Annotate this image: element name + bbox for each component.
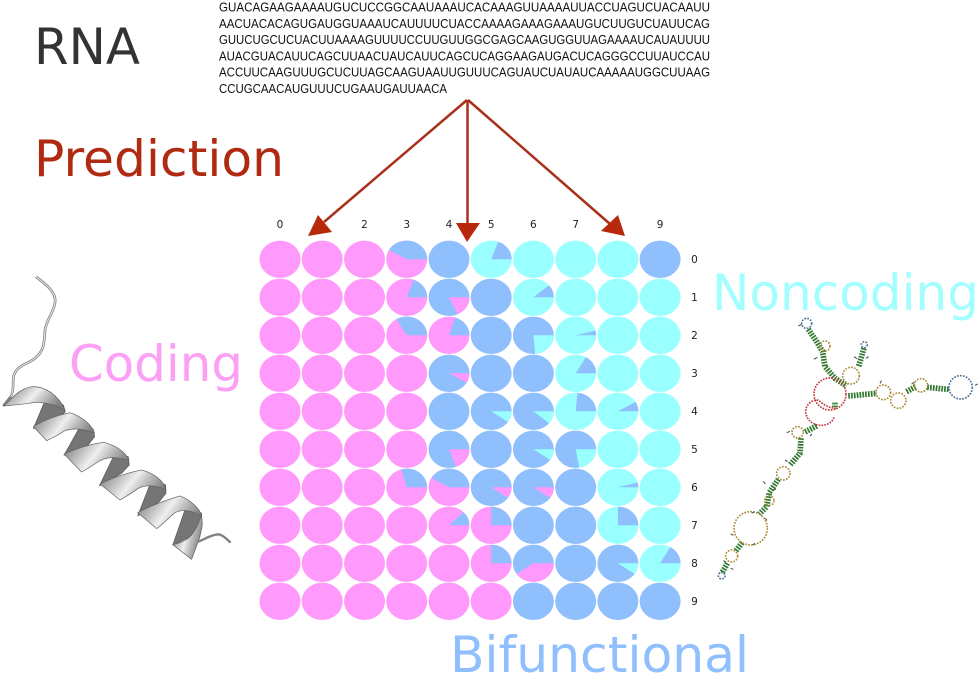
row axis labels: 0 — [691, 254, 698, 266]
pie row 6 — [260, 469, 681, 506]
column axis labels: 9 — [657, 219, 663, 231]
pie row 8 — [260, 545, 681, 582]
pie row 2 — [260, 317, 681, 354]
RNA sequence text block: AUACGUACAUUCAGCUUAACUAUCAUUCAGCUCAGGAAGAUGACUCAGGGCCUUAUCCAU — [219, 48, 710, 64]
pie row 9 — [260, 583, 681, 620]
column axis labels: 0 — [277, 219, 283, 231]
title: Prediction: Prediction — [34, 130, 284, 188]
pie row 7 — [260, 507, 681, 544]
arrow: to coding column — [308, 100, 467, 236]
pie row 0 — [260, 241, 681, 278]
row axis labels: 8 — [691, 558, 698, 570]
pie row 1 — [260, 279, 681, 316]
RNA secondary structure diagram — [718, 318, 978, 579]
arrow: to bifunctional column — [456, 100, 480, 242]
hairpin and internal loops — [718, 318, 972, 579]
pie row 5 — [260, 431, 681, 468]
label: Coding: Coding — [69, 335, 243, 393]
RNA sequence text block — [219, 0, 710, 96]
RNA sequence text block: CCUGCAACAUGUUUCUGAAUGAUUAACA — [219, 81, 447, 96]
row axis labels: 9 — [691, 596, 698, 608]
row axis labels: 7 — [691, 520, 698, 532]
column axis labels: 5 — [488, 219, 495, 231]
title: RNA: RNA — [34, 18, 140, 76]
row axis labels: 2 — [691, 330, 698, 342]
column axis labels: 3 — [403, 219, 410, 231]
row axis labels: 4 — [691, 406, 698, 418]
RNA sequence text block: ACCUUCAAGUUUGCUCUUAGCAAGUAAUUGUUUCAGUAUCUAUAUCAAAAAUGGCUUAAG — [219, 64, 710, 80]
column axis labels: 4 — [446, 219, 453, 231]
column axis labels: 6 — [530, 219, 537, 231]
stems — [722, 329, 949, 573]
row axis labels: 3 — [691, 368, 698, 380]
row axis labels: 5 — [691, 444, 698, 456]
RNA sequence text block: AACUACACAGUGAUGGUAAAUCAUUUUCUACCAAAAGAAAGAAAUGUCUUGUCUAUUCAG — [219, 16, 710, 31]
base tick marks — [723, 324, 978, 569]
protein helix ribbon illustration — [3, 277, 231, 559]
row axis labels — [691, 254, 698, 608]
label: Noncoding: Noncoding — [712, 264, 979, 322]
column axis labels: 2 — [361, 219, 368, 231]
pie row 4 — [260, 393, 681, 430]
pie row 3 — [260, 355, 681, 392]
column axis labels: 7 — [572, 219, 579, 231]
RNA sequence text block: GUUCUGCUCUACUUAAAAGUUUUCCUUGUUGGCGAGCAAGUGGUUAGAAAAUCAUAUUUU — [219, 32, 710, 47]
arrow: to noncoding column — [468, 100, 625, 236]
row axis labels: 1 — [691, 292, 698, 304]
column axis labels — [277, 219, 663, 231]
pie grid chart — [260, 219, 698, 620]
row axis labels: 6 — [691, 482, 698, 494]
